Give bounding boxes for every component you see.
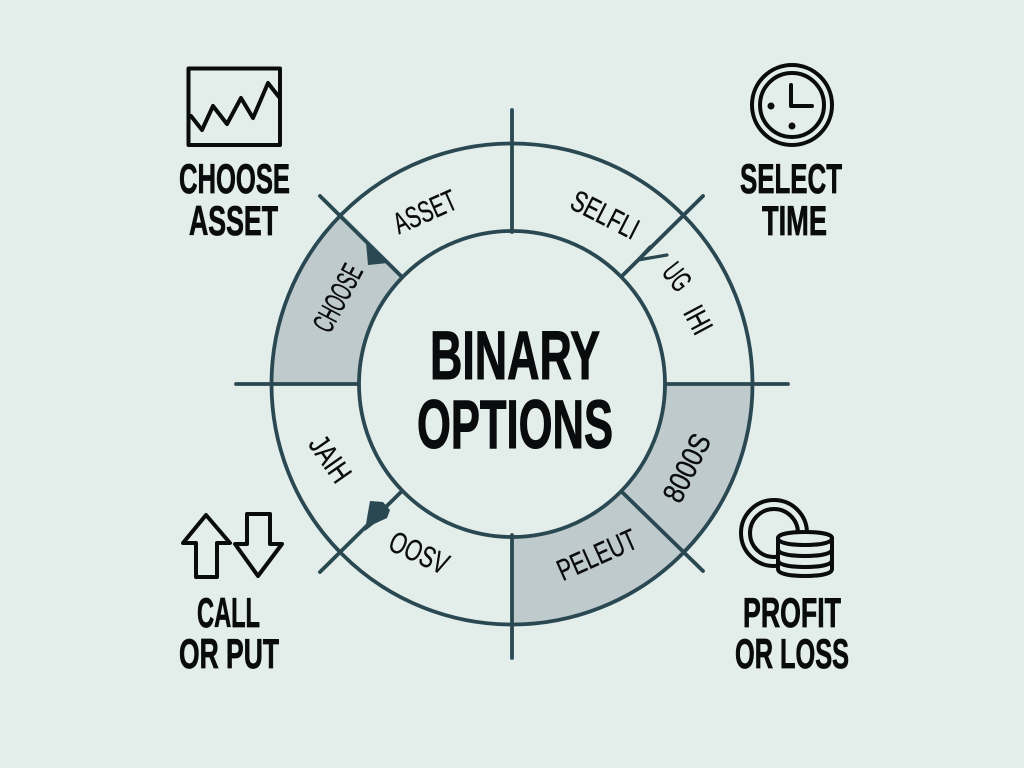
segment label: 8000s: 8000S xyxy=(657,429,718,508)
label: choose asset: ASSET xyxy=(189,197,278,244)
label: choose asset xyxy=(179,155,290,244)
label: select time xyxy=(740,155,842,244)
icon: coin and stack xyxy=(741,500,832,576)
icon: clock xyxy=(752,65,832,145)
step: choose asset xyxy=(179,68,290,244)
segment label: peleut: PELEUT xyxy=(552,523,642,588)
segment label: asset: ASSET xyxy=(388,184,462,241)
segment label: ug: UG xyxy=(655,257,698,298)
cycle wheel xyxy=(236,110,788,658)
shaded segment: profit and loss xyxy=(512,384,753,623)
segment label: select: SELFLI xyxy=(565,184,644,246)
step: call or put xyxy=(179,514,282,677)
label: profit or loss: OR LOSS xyxy=(735,630,849,677)
marker: triangle xyxy=(366,242,388,265)
inner ring xyxy=(359,231,665,537)
center title: OPTIONS xyxy=(417,386,613,463)
segment label: jaih: JAIH xyxy=(302,429,357,489)
center title: BINARY xyxy=(430,317,600,394)
label: call or put: OR PUT xyxy=(179,630,279,677)
label: select time: TIME xyxy=(762,197,827,244)
label: choose asset: CHOOSE xyxy=(179,155,290,202)
label: call or put xyxy=(179,589,279,677)
outer ring xyxy=(272,144,752,624)
label: call or put: CALL xyxy=(197,589,260,636)
label: select time: SELECT xyxy=(740,155,842,202)
shaded segment: choose xyxy=(271,214,404,384)
marker: tick xyxy=(638,247,667,260)
segment label: choose: CHOOSE xyxy=(307,259,370,338)
icon: line chart xyxy=(188,68,280,145)
icon: up and down arrows xyxy=(183,514,282,577)
step: select time xyxy=(740,65,842,244)
segment label: oosv: OOSV xyxy=(384,525,454,582)
spoke dividers xyxy=(236,110,788,658)
label: profit or loss: PROFIT xyxy=(743,589,841,636)
label: profit or loss xyxy=(735,589,849,677)
step: profit or loss xyxy=(735,500,849,677)
center title xyxy=(417,317,613,463)
segment label: ihi: IHI xyxy=(676,300,719,340)
marker: diamond xyxy=(365,501,390,531)
